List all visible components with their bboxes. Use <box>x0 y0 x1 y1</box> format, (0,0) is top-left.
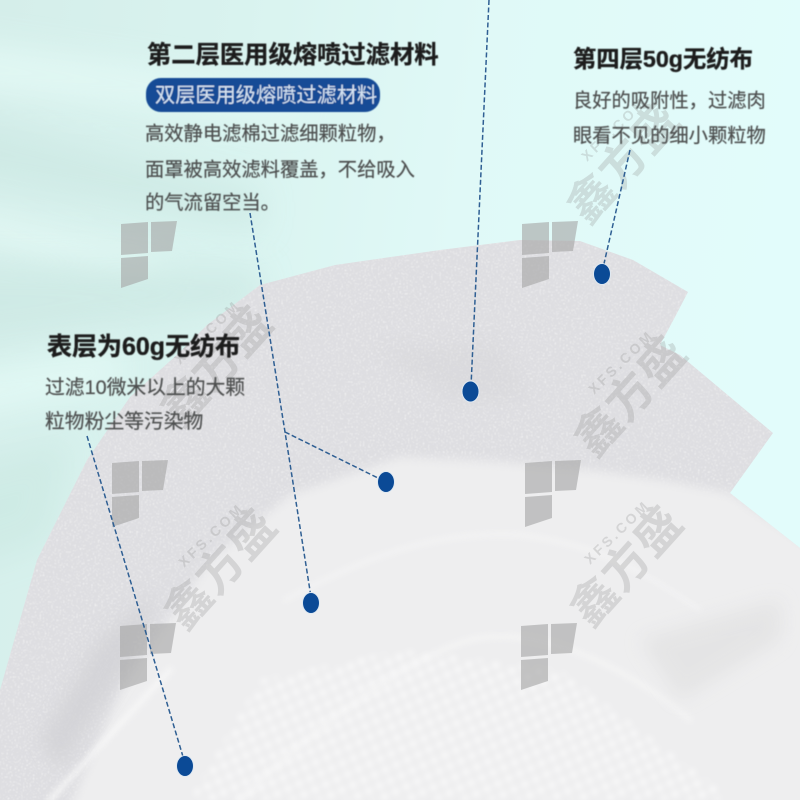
description: fourth layer: 眼看不见的细小颗粒物 <box>573 125 766 147</box>
inner sheets clipped to the mask outline <box>46 458 800 800</box>
dimple pattern <box>190 650 720 800</box>
description: fourth layer: 良好的吸附性，过滤肉 <box>573 90 766 112</box>
pill tag: 双层医用级熔喷过滤材料 <box>155 84 377 107</box>
text block: second layer <box>145 42 439 214</box>
line from second layer text <box>250 213 311 597</box>
branch line to second layer dot <box>285 432 382 480</box>
watermark logo tiles <box>112 221 581 690</box>
description: second layer: 面罩被高效滤料覆盖，不给吸入 <box>145 159 415 181</box>
description: fourth layer <box>573 90 766 147</box>
fold shadow left <box>46 612 144 758</box>
description: surface layer <box>45 377 245 433</box>
fold shadow lower right <box>659 614 772 684</box>
description: surface layer: 粒物粉尘等污染物 <box>45 411 203 433</box>
leader lines <box>87 0 630 760</box>
heading: fourth layer: 第四层50g无纺布 <box>573 46 753 72</box>
fold shadow centre <box>380 345 530 400</box>
marker dots <box>176 264 610 776</box>
line to third layer dot <box>471 0 489 386</box>
heading: surface layer: 表层为60g无纺布 <box>47 333 240 361</box>
speckle over inner sheets <box>60 457 800 800</box>
text block: fourth layer <box>573 46 766 147</box>
heading: second layer: 第二层医用级熔喷过滤材料 <box>147 42 439 69</box>
description: surface layer: 过滤10微米以上的大颗 <box>45 377 245 399</box>
line from surface layer text <box>87 436 184 760</box>
description: second layer <box>145 123 415 214</box>
line from fourth layer text <box>603 150 630 268</box>
fold ridges <box>48 746 98 800</box>
watermark text <box>150 94 696 639</box>
text block: surface layer <box>45 333 245 433</box>
pill tag <box>146 78 380 112</box>
mask layer illustration <box>0 240 800 800</box>
description: second layer: 的气流留空当。 <box>145 192 280 214</box>
background streaks <box>0 40 300 570</box>
fourth layer: back non-woven sheet <box>0 240 800 800</box>
first and second layers: lighter inner sheets <box>60 457 800 800</box>
description: second layer: 高效静电滤棉过滤细颗粒物， <box>145 123 396 145</box>
